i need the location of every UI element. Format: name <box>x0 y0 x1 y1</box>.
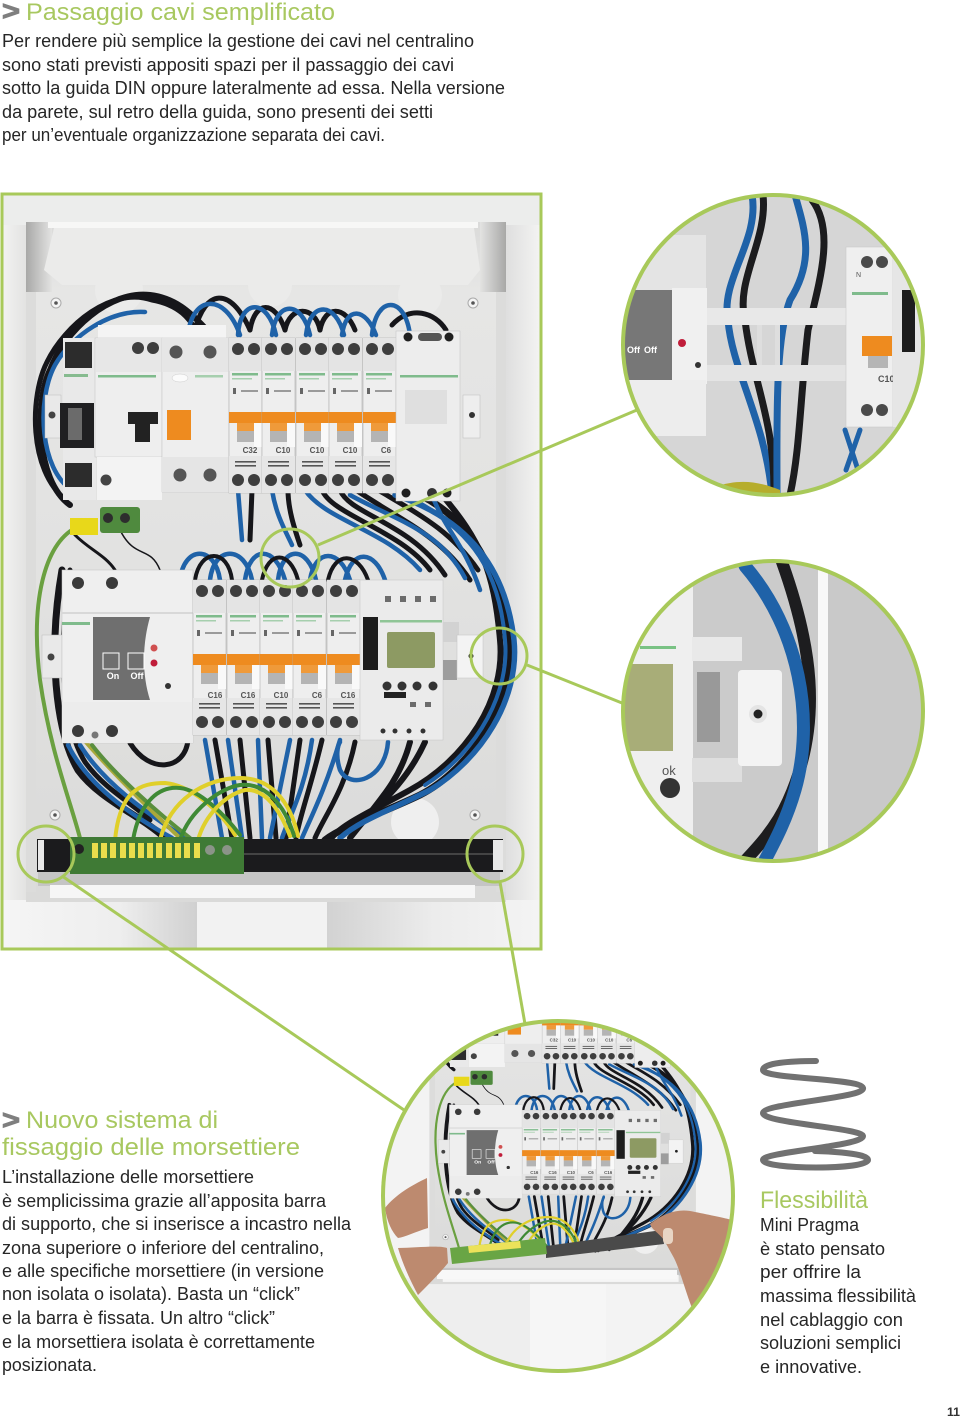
hand: right <box>650 1210 732 1308</box>
rail held in the hands <box>546 1230 664 1258</box>
hand: left <box>385 1178 448 1295</box>
text block: flexibility: per offrire la <box>760 1262 862 1282</box>
page number: 11 <box>947 1407 960 1419</box>
detail circle: fixing bracket: ok <box>662 763 676 778</box>
text block: flexibility: massima flessibilità <box>760 1286 917 1306</box>
text block: terminal fixing system: di supporto, che si inserisce a incastro nella <box>2 1214 352 1234</box>
text block: flexibility: e innovative. <box>760 1357 862 1377</box>
text block: flexibility: nel cablaggio con <box>760 1310 903 1330</box>
text block: terminal fixing system: è semplicissima grazie all’apposita barra <box>2 1191 327 1211</box>
callout ring: fixing bracket <box>471 628 527 684</box>
panel: main photo of the consumer unit <box>2 194 541 949</box>
marker: second heading chevron: > <box>2 1105 20 1135</box>
callout ring: rail right <box>467 826 523 882</box>
text block: intro <box>2 31 505 145</box>
earth terminal block <box>70 837 244 874</box>
text block: flexibility: Mini Pragma <box>760 1215 860 1235</box>
detail circle: inserting the terminal rail <box>381 1019 735 1373</box>
detail circle: cable separators: N <box>856 272 861 279</box>
heading: Nuovo sistema di fissaggio delle morsettiere: fissaggio delle morsettiere <box>2 1134 300 1161</box>
callout ring: wires <box>261 529 319 587</box>
text block: terminal fixing system: e la barra è fissata. Un altro “click” <box>2 1308 275 1328</box>
detail circle: cable separators: Off <box>627 345 641 355</box>
text block: flexibility <box>760 1215 917 1377</box>
text block: terminal fixing system: zona superiore o inferiore del centralino, <box>2 1238 324 1258</box>
connector lines <box>62 410 637 1110</box>
text block: flexibility: è stato pensato <box>760 1239 885 1259</box>
text block: flexibility: soluzioni semplici <box>760 1333 901 1353</box>
detail circle: cable separators: C10 <box>878 374 895 384</box>
detail circle: cable separators: Off <box>644 345 658 355</box>
icon: spring <box>763 1061 868 1168</box>
text block: intro: Per rendere più semplice la gestione dei cavi nel centralino <box>2 31 474 51</box>
text block: intro: da parete, sul retro della guida, sono presenti dei setti <box>2 102 433 122</box>
text block: terminal fixing system: non isolata o isolata). Basta un “click” <box>2 1284 300 1304</box>
terminal in the hands <box>450 1238 547 1264</box>
text block: intro: per un’eventuale organizzazione separata dei cavi. <box>2 125 385 145</box>
callout ring: rail left <box>18 826 74 882</box>
heading: Nuovo sistema di fissaggio delle morsettiere: Nuovo sistema di <box>26 1107 218 1134</box>
text block: intro: sono stati previsti appositi spazi per il passaggio dei cavi <box>2 55 454 75</box>
text block: terminal fixing system: e alle specifiche morsettiere (in versione <box>2 1261 324 1281</box>
heading: Nuovo sistema di fissaggio delle morsettiere <box>2 1107 300 1161</box>
text block: terminal fixing system <box>2 1167 352 1375</box>
text block: terminal fixing system: L’installazione delle morsettiere <box>2 1167 254 1187</box>
detail circle: cable separators <box>620 192 930 498</box>
detail circle: fixing bracket <box>620 558 930 866</box>
heading: Flessibilità: Flessibilità <box>760 1187 869 1214</box>
text block: intro: sotto la guida DIN oppure lateralmente ad essa. Nella versione <box>2 78 505 98</box>
text block: terminal fixing system: e la morsettiera isolata è correttamente <box>2 1332 315 1352</box>
text block: terminal fixing system: posizionata. <box>2 1355 97 1375</box>
black DIN rail <box>37 839 503 872</box>
